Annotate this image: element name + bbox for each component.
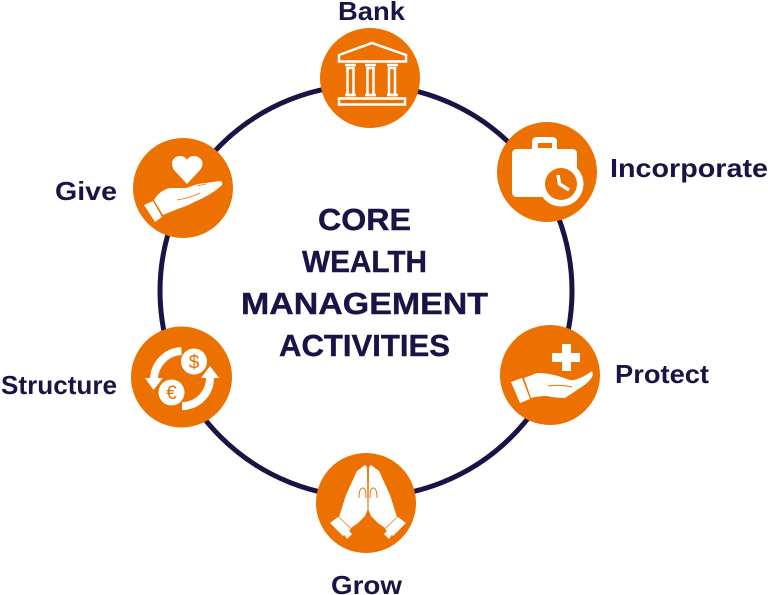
icon: briefcase with clock	[512, 137, 584, 206]
title: MANAGEMENT	[241, 286, 488, 321]
title	[241, 202, 488, 363]
label: Incorporate: Incorporate	[610, 153, 768, 183]
dollar sign: $	[189, 352, 200, 374]
icon: bank building	[339, 43, 406, 104]
icon: praying hands	[330, 465, 406, 539]
label: Give: Give	[55, 176, 117, 206]
title: WEALTH	[302, 244, 427, 279]
label: Structure: Structure	[1, 370, 117, 400]
icon: currency exchange	[145, 348, 219, 406]
activity: Structure	[1, 326, 232, 428]
activity: Grow	[316, 453, 416, 595]
icon: hand with medical cross	[511, 344, 593, 403]
activity: Protect	[500, 325, 709, 425]
activity: Give	[55, 138, 233, 238]
title: ACTIVITIES	[279, 328, 450, 363]
label: Protect: Protect	[615, 359, 709, 389]
title: CORE	[318, 202, 411, 237]
icon: hand with heart	[144, 156, 222, 222]
activity: Incorporate	[497, 122, 768, 222]
ring connecting activities	[160, 85, 572, 497]
euro sign: €	[166, 383, 177, 404]
activity: Bank	[320, 0, 420, 128]
